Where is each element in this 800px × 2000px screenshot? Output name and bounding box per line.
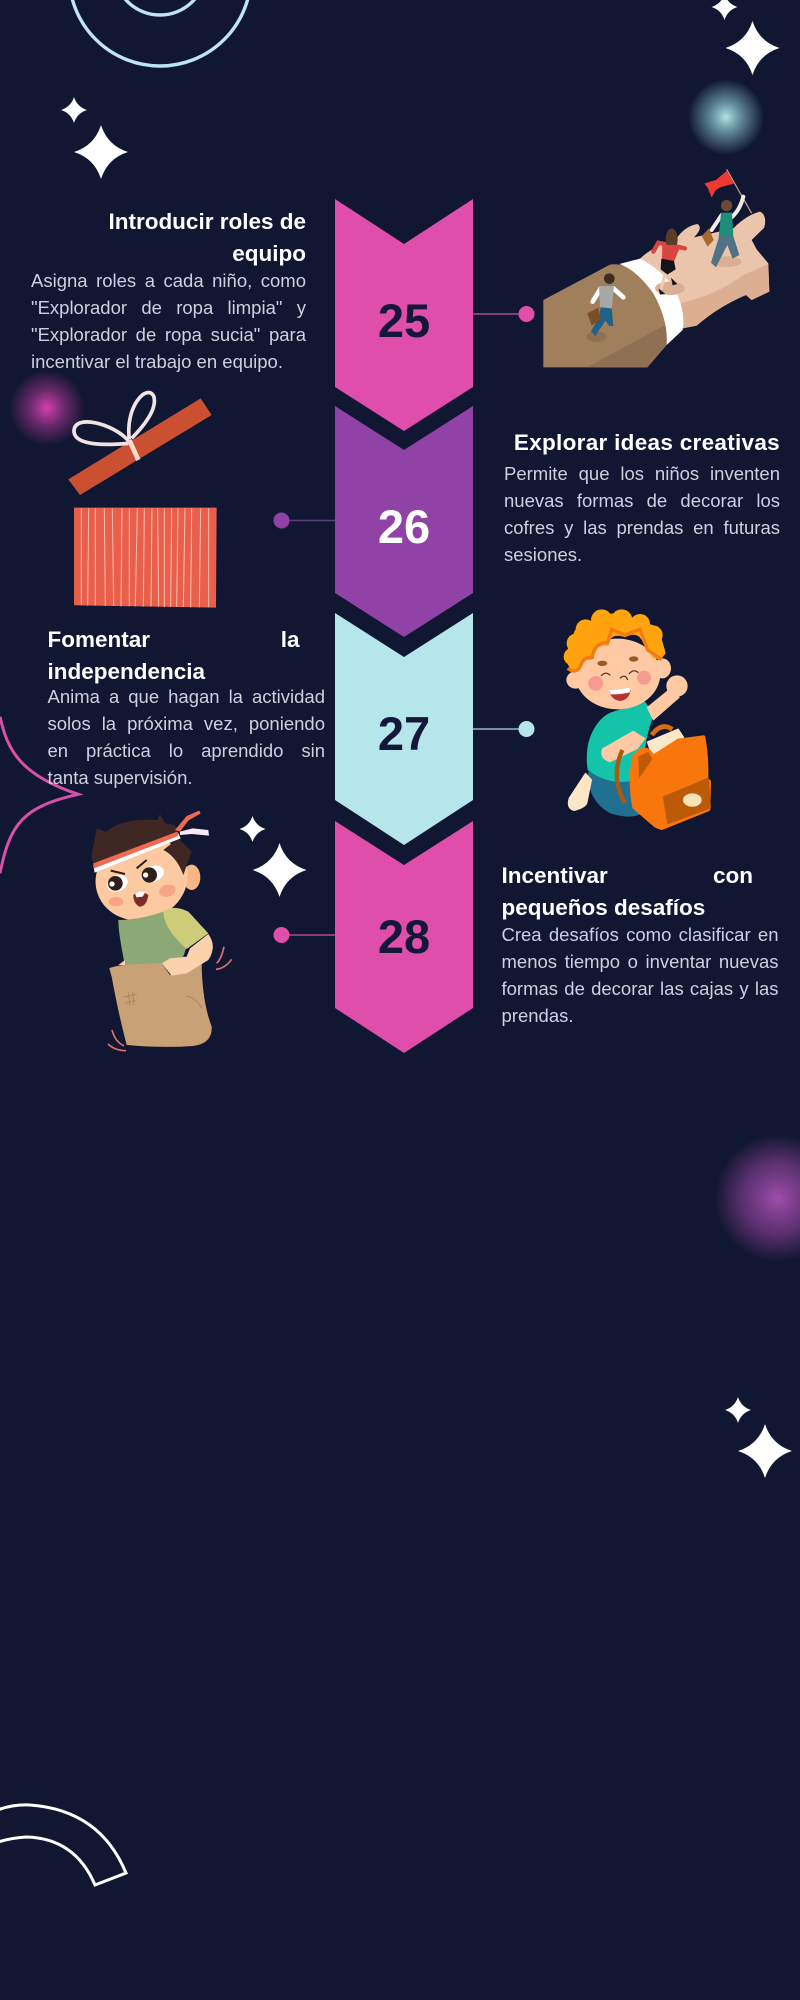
decorative arc outline bottom left [0, 1805, 126, 1885]
body text [31, 270, 306, 372]
decorative concentric circles [69, 0, 251, 66]
text block: Fomentar la independencia [48, 627, 325, 788]
body text: sesiones. [504, 544, 582, 565]
heading [502, 863, 753, 920]
heading: Incentivar con [502, 863, 753, 888]
glow: teal [688, 79, 764, 155]
body text: nuevas formas de decorar los [504, 490, 780, 511]
sparkles lower right [725, 1397, 792, 1478]
text block: Explorar ideas creativas [504, 430, 780, 565]
body text: "Explorador de ropa sucia" para [31, 324, 306, 345]
illustration: boy in sack race [84, 811, 232, 1051]
body text: prendas. [502, 1005, 574, 1026]
body text: formas de decorar las cajas y las [502, 978, 778, 999]
heading: pequeños desafíos [502, 895, 705, 920]
body text [48, 686, 325, 788]
body text: tanta supervisión. [48, 767, 193, 788]
heading: Introducir roles de [108, 209, 306, 234]
illustration: hand with climbing people [543, 169, 769, 367]
chevron 28 [335, 821, 473, 1053]
chevron 26 [335, 406, 473, 637]
body text: Anima a que hagan la actividad [48, 686, 325, 707]
body text [504, 463, 780, 565]
illustration: open gift box [68, 392, 217, 608]
body text: Crea desafíos como clasificar en [502, 924, 778, 945]
sparkles beside sack boy [240, 816, 306, 897]
body text: solos la próxima vez, poniendo [48, 713, 325, 734]
person: leader with flag [702, 169, 752, 267]
connector 27 [473, 721, 534, 737]
body text: "Explorador de ropa limpia" y [31, 297, 306, 318]
body text: incentivar el trabajo en equipo. [31, 351, 283, 372]
heading [48, 627, 300, 684]
heading [108, 209, 306, 266]
connector 25 [473, 306, 534, 322]
body text: en práctica lo aprendido sin [48, 740, 325, 761]
connector 28 [274, 927, 335, 943]
illustration: boy with backpack [564, 609, 710, 828]
person: woman on cuff [653, 228, 685, 295]
decorative pink star outline left [0, 717, 78, 873]
glow: purple [714, 1134, 800, 1262]
glow: pink [9, 370, 85, 446]
body text [502, 924, 778, 1026]
chevron 25: 25 [378, 294, 430, 347]
heading: independencia [48, 659, 205, 684]
connector 26 [274, 512, 335, 528]
chevron 27 [335, 613, 473, 845]
sparkles top right [712, 0, 780, 75]
heading: Explorar ideas creativas [514, 430, 780, 455]
person: runner on sleeve [587, 273, 623, 336]
sparkles top left [61, 97, 128, 179]
text block: Introducir roles de equipo: equipo [232, 241, 306, 266]
chevron 27: 27 [378, 707, 430, 760]
chevron 25 [335, 199, 473, 431]
body text: menos tiempo o inventar nuevas [502, 951, 778, 972]
chevron 28: 28 [378, 910, 430, 963]
text block: Introducir roles de equipo [31, 209, 306, 372]
body text: Asigna roles a cada niño, como [31, 270, 306, 291]
heading: Fomentar la [48, 627, 300, 652]
chevron 26: 26 [378, 500, 430, 553]
text block: Incentivar con pequeños desafíos [502, 863, 778, 1026]
body text: Permite que los niños inventen [504, 463, 780, 484]
body text: cofres y las prendas en futuras [504, 517, 780, 538]
